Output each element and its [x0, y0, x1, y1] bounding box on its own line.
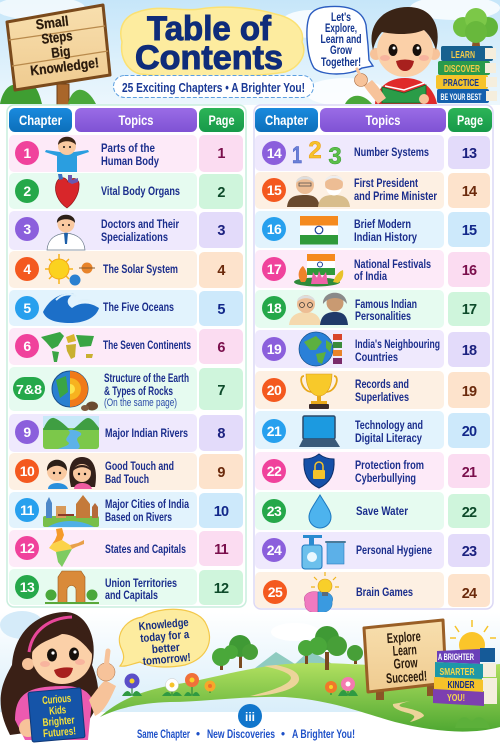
- row: chapter 5: The Five Oceans: [103, 300, 174, 314]
- row: chapter 24: [255, 532, 490, 569]
- row: chapter 10: [9, 453, 243, 490]
- row: chapters 7 and 8: [9, 367, 243, 411]
- row: chapter 23: 22: [462, 505, 477, 521]
- row: chapter 9: Major Indian Rivers: [105, 426, 188, 440]
- footer tagline: Same Chapter: [137, 729, 190, 741]
- header: Page: [448, 108, 492, 132]
- row: chapter 3: [9, 211, 243, 250]
- speech bubble: Let's Explore: Together!: [321, 57, 361, 69]
- row: chapter 3: Specializations: [101, 230, 168, 244]
- row: chapter 13: and Capitals: [105, 588, 158, 602]
- row: chapter 22: Cyberbullying: [355, 471, 416, 485]
- illustration: book stack A BRIGHTER SMARTER KINDER YOU: [433, 648, 497, 706]
- row: chapter 6: 6: [23, 338, 31, 354]
- illustration: tree: [453, 8, 498, 46]
- row: chapter 12: [9, 528, 243, 567]
- header: Topics: [320, 108, 446, 132]
- row: chapter 17: National Festivals: [354, 257, 431, 271]
- row: chapter 15: 14: [462, 184, 477, 200]
- row: chapter 5: 5: [23, 300, 31, 316]
- row: chapter 2: 2: [217, 185, 225, 201]
- row: chapters 7 and 8: Structure of the Earth: [104, 371, 189, 385]
- row: chapter 25: 25: [268, 584, 283, 600]
- row: chapter 23: [255, 492, 490, 530]
- wooden sign: Small Steps Big Knowledge: [0, 5, 110, 106]
- background: header sky: [0, 0, 500, 106]
- row: chapter 12: 12: [20, 540, 35, 556]
- row: chapter 19: Countries: [355, 350, 398, 364]
- illustration: girl with book: [1, 612, 116, 742]
- illustration: book stack LEARN DISCOVER PRACTICE BE YOUR BEST: DISCOVER: [444, 64, 481, 75]
- row: chapter 9: 9: [23, 424, 31, 440]
- title cloud: [121, 7, 304, 77]
- speech bubble: Knowledge today: [119, 609, 209, 668]
- icon: numbers 1 2 3: [292, 137, 342, 170]
- title text: Contents: [135, 39, 283, 77]
- book: Curious Kids Brighter Futures: Brighter: [42, 714, 76, 729]
- footer tagline: A Brighter You!: [292, 729, 355, 741]
- speech bubble: Let's Explore: Learn and: [320, 34, 362, 46]
- row: chapters 7 and 8: 7: [217, 383, 225, 399]
- row: chapter 1: Parts of the: [101, 141, 155, 155]
- row: chapter 10: Bad Touch: [105, 472, 149, 486]
- row: chapter 13: Union Territories: [105, 576, 177, 590]
- row: chapter 11: Major Cities of India: [105, 497, 189, 511]
- row: chapter 21: Digital Literacy: [355, 431, 422, 445]
- row: chapter 25: [255, 572, 490, 612]
- wooden sign: Explore Learn Grow Succeed: [364, 620, 446, 700]
- illustration: book stack LEARN DISCOVER PRACTICE BE YOUR BEST: PRACTICE: [443, 78, 479, 89]
- page number badge: iii: [245, 710, 255, 724]
- row: chapter 12: 11: [214, 542, 229, 558]
- book: Curious Kids Brighter Futures: Kids: [49, 704, 67, 718]
- row: chapter 5: [9, 290, 243, 326]
- row: chapter 15: First President: [354, 176, 418, 190]
- row: chapter 2: [9, 173, 243, 209]
- icon: trophy: [301, 374, 337, 409]
- row: chapter 18: Famous Indian: [355, 297, 417, 311]
- illustration: book stack LEARN DISCOVER PRACTICE BE YOUR BEST: [436, 46, 497, 103]
- title text: Table of: [147, 10, 272, 48]
- icon: world map: [41, 332, 94, 362]
- row: chapter 1: [9, 135, 243, 172]
- icon: Indian flag: [300, 216, 338, 244]
- icon: solar system: [45, 254, 95, 286]
- row: chapter 21: [255, 411, 490, 449]
- row: chapter 18: Personalities: [355, 309, 411, 323]
- row: chapter 14: [255, 135, 490, 171]
- header: Chapter: Chapter: [19, 113, 63, 128]
- icon: earth cross-section and rocks: [52, 371, 98, 411]
- wooden sign: Explore Learn Grow Succeed: Succeed!: [386, 667, 428, 686]
- icon: heart organ: [55, 174, 79, 208]
- row: chapter 2: Vital Body Organs: [101, 184, 180, 198]
- row: chapter 9: 8: [217, 426, 225, 442]
- row: chapter 25: 24: [462, 586, 477, 602]
- subtitle pill: [114, 76, 314, 98]
- icon: ocean wave: [43, 294, 99, 323]
- row: chapter 20: Superlatives: [355, 390, 409, 404]
- icon: boy and girl: [47, 457, 96, 489]
- speech bubble: Knowledge today: better: [151, 642, 181, 656]
- row: chapter 17: 16: [462, 263, 477, 279]
- footer tagline: •: [196, 729, 200, 741]
- row: chapter 4: [9, 251, 243, 288]
- row: chapter 16: 15: [462, 223, 477, 239]
- row: chapter 13: [9, 569, 243, 605]
- header: Page: Page: [457, 113, 483, 128]
- footer tagline: •: [281, 729, 285, 741]
- wooden sign: Explore Learn Grow Succeed: Grow: [393, 654, 418, 672]
- row: chapter 11: [9, 492, 243, 528]
- icon: two leaders: [287, 175, 350, 207]
- row: chapter 1: Human Body: [101, 154, 159, 168]
- wooden sign: Small Steps Big Knowledge: Knowledge!: [29, 54, 100, 79]
- icon: river landscape: [43, 416, 99, 449]
- row: chapter 21: 20: [462, 424, 477, 440]
- row: chapter 3: Doctors and Their: [101, 217, 179, 231]
- row: chapter 14: Number Systems: [354, 145, 429, 159]
- header: Page: Page: [208, 113, 235, 128]
- icon: India Gate and trees: [45, 571, 99, 604]
- speech bubble: Let's Explore: Grow: [330, 45, 352, 57]
- row: chapter 4: 4: [23, 261, 31, 277]
- icon: city on river: [43, 495, 99, 527]
- row: chapter 23: Save Water: [356, 504, 408, 518]
- row: chapter 25: Brain Games: [356, 585, 413, 599]
- row: chapter 23: 23: [267, 503, 282, 519]
- row: chapter 15: and Prime Minister: [354, 189, 437, 203]
- row: chapter 11: 11: [20, 502, 35, 518]
- speech bubble: Knowledge today: Knowledge: [138, 617, 189, 633]
- illustration: boy reading a book: [354, 7, 440, 104]
- bottom scene: sky, hills and path: [0, 611, 500, 750]
- row: chapter 14: 14: [267, 145, 282, 161]
- left table panel: [7, 105, 246, 607]
- footer tagline: [137, 729, 355, 741]
- row: chapter 6: The Seven Continents: [103, 338, 191, 352]
- header: Chapter: [255, 108, 318, 132]
- row: chapter 18: 17: [462, 302, 477, 318]
- row: chapters 7 and 8: 7&8: [16, 382, 42, 397]
- row: chapter 16: 16: [267, 221, 282, 237]
- icon: numbers 1 2 3: 3: [328, 143, 342, 170]
- row: chapter 10: Good Touch and: [105, 459, 174, 473]
- speech bubble: Let's Explore: Let's: [331, 12, 351, 24]
- icon: flag with flowers: [294, 254, 343, 286]
- row: chapter 10: 10: [20, 463, 35, 479]
- illustration: book stack A BRIGHTER SMARTER KINDER YOU: YOU!: [447, 693, 465, 704]
- row: chapter 13: 12: [214, 581, 229, 597]
- row: chapter 1: 1: [23, 145, 31, 161]
- icon: two personalities: [289, 293, 348, 325]
- row: chapter 20: 20: [267, 382, 282, 398]
- row: chapter 19: [255, 330, 490, 368]
- wooden sign: Small Steps Big Knowledge: Steps: [41, 27, 73, 47]
- row: chapter 24: Personal Hygiene: [356, 543, 432, 557]
- row: chapter 12: States and Capitals: [105, 542, 186, 556]
- speech bubble: Knowledge today: tomorrow!: [142, 652, 191, 668]
- row: chapter 13: 13: [20, 579, 35, 595]
- illustration: trees: [212, 626, 363, 670]
- book: Curious Kids Brighter Futures: [28, 688, 85, 742]
- row: chapter 24: 23: [462, 544, 477, 560]
- row: chapter 2: 2: [23, 183, 31, 199]
- row: chapter 22: Protection from: [355, 458, 424, 472]
- row: chapter 22: [255, 452, 490, 490]
- row: chapter 6: [9, 328, 243, 365]
- row: chapter 11: 10: [214, 504, 229, 520]
- illustration: book stack LEARN DISCOVER PRACTICE BE YOUR BEST: LEARN: [451, 50, 475, 61]
- row: chapter 6: 6: [217, 340, 225, 356]
- row: chapter 3: 3: [23, 221, 31, 237]
- row: chapter 17: of India: [354, 269, 387, 283]
- page number badge: [238, 704, 262, 728]
- speech bubble: Let's Explore: [307, 6, 373, 74]
- row: chapter 20: [255, 371, 490, 409]
- header: Topics: [75, 108, 197, 132]
- row: chapter 21: Technology and: [355, 418, 423, 432]
- subtitle pill: 25 Exciting Chapters • A Brighter You!: [122, 80, 305, 95]
- icon: India map: [49, 528, 84, 567]
- right table panel: [254, 105, 493, 612]
- icon: doctor: [47, 215, 85, 250]
- row: chapter 17: 17: [267, 261, 282, 277]
- speech bubble: Knowledge today: today for a: [140, 629, 190, 645]
- row: chapter 15: 15: [267, 182, 282, 198]
- row: chapter 18: 18: [267, 300, 282, 316]
- icon: globe with flags: [299, 332, 342, 366]
- header: Topics: Topics: [366, 113, 400, 128]
- row: chapter 15: [255, 172, 490, 209]
- icon: shield with lock: [304, 454, 334, 488]
- illustration: flowers: [122, 673, 358, 696]
- wooden sign: Small Steps Big Knowledge: Small: [35, 13, 69, 32]
- row: chapter 19: India's Neighbouring: [355, 337, 440, 351]
- illustration: book stack A BRIGHTER SMARTER KINDER YOU: KINDER: [448, 680, 475, 691]
- row: chapter 1: 1: [217, 146, 225, 162]
- row: chapter 24: 24: [267, 542, 282, 558]
- row: chapter 22: 21: [462, 465, 477, 481]
- row: chapter 20: Records and: [355, 377, 409, 391]
- header: Chapter: Chapter: [265, 113, 309, 128]
- header: Topics: Topics: [118, 113, 154, 128]
- icon: numbers 1 2 3: 2: [308, 137, 322, 164]
- icon: soap and towel: [302, 535, 346, 569]
- row: chapter 19: 18: [462, 343, 477, 359]
- row: chapter 16: Indian History: [354, 230, 417, 244]
- row: chapter 22: 22: [267, 463, 282, 479]
- header: Chapter: [9, 108, 72, 132]
- row: chapter 18: [255, 290, 490, 328]
- book: Curious Kids Brighter Futures: Futures!: [43, 725, 77, 740]
- wooden sign: Explore Learn Grow Succeed: Explore: [386, 628, 421, 646]
- row: chapter 4: 4: [217, 263, 225, 279]
- row: chapter 14: 13: [462, 146, 477, 162]
- row: chapter 3: 3: [217, 223, 225, 239]
- row: chapter 21: 21: [267, 423, 282, 439]
- icon: laptop: [299, 416, 340, 447]
- illustration: book stack A BRIGHTER SMARTER KINDER YOU: SMARTER: [440, 667, 475, 678]
- row: chapter 10: 9: [217, 465, 225, 481]
- row: chapter 16: Brief Modern: [354, 217, 411, 231]
- icon: numbers 1 2 3: 1: [292, 142, 302, 169]
- wooden sign: Explore Learn Grow Succeed: Learn: [392, 641, 417, 659]
- row: chapter 11: Based on Rivers: [105, 510, 172, 524]
- footer tagline: New Discoveries: [207, 729, 275, 741]
- icon: brain and light bulb: [304, 572, 339, 612]
- icon: boy, body: [45, 137, 89, 172]
- row: chapter 5: 5: [217, 302, 225, 318]
- row: chapter 4: The Solar System: [103, 262, 178, 276]
- illustration: book stack A BRIGHTER SMARTER KINDER YOU: A BRIGHTER: [438, 652, 474, 663]
- row: chapter 9: [9, 414, 243, 452]
- row: chapters 7 and 8: & Types of Rocks: [104, 384, 173, 398]
- row: chapter 16: [255, 211, 490, 248]
- row: chapters 7 and 8: (On the same page): [104, 397, 177, 409]
- header: Page: [199, 108, 244, 132]
- book: Curious Kids Brighter Futures: Curious: [42, 693, 72, 707]
- illustration: sun: [450, 620, 496, 658]
- speech bubble: Let's Explore: Explore,: [325, 23, 357, 35]
- row: chapter 19: 19: [267, 341, 282, 357]
- wooden sign: Small Steps Big Knowledge: Big: [50, 43, 71, 61]
- row: chapter 20: 19: [462, 384, 477, 400]
- row: chapter 17: [255, 250, 490, 288]
- icon: water drop: [309, 495, 331, 528]
- title text: [135, 10, 283, 77]
